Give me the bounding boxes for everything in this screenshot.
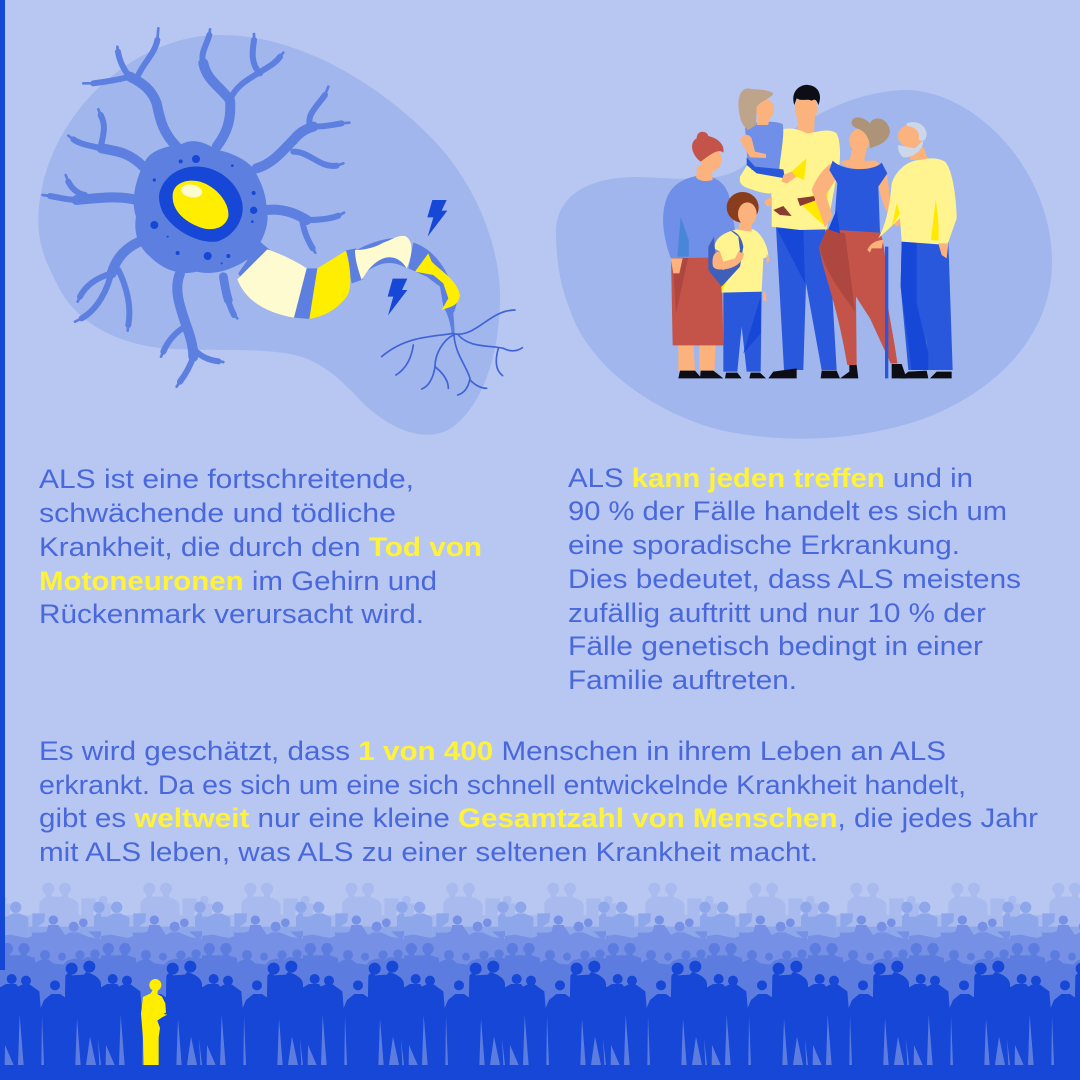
icon: yellow person in crowd: [141, 979, 167, 1065]
boy with backpack: [708, 192, 770, 372]
text block: right column: ALS kann jeden treffen und in: [568, 463, 973, 493]
text block: right column: 90 % der Fälle handelt es sich um: [568, 496, 1007, 526]
axon: [238, 237, 457, 335]
girl carried: [738, 88, 815, 216]
text block: right column: eine sporadische Erkrankung.: [568, 530, 960, 560]
cane: [885, 247, 888, 378]
myelin segments: [237, 249, 307, 318]
illustration: neuron: [38, 28, 522, 435]
text block: left column: schwächende und tödliche: [39, 498, 396, 528]
grandmother left: [663, 132, 766, 378]
text block: full width: mit ALS leben, was ALS zu einer seltenen Krankheit macht.: [39, 837, 818, 867]
text block: right column: Dies bedeutet, dass ALS meistens: [568, 564, 1021, 594]
text block: right column: [568, 463, 1021, 695]
dendrites: [43, 28, 349, 387]
illustration: family: [556, 85, 1052, 439]
blob behind family: [556, 90, 1052, 439]
blob behind neuron: [38, 35, 500, 435]
cell body: [134, 141, 268, 273]
text block: right column: Fälle genetisch bedingt in einer: [568, 631, 983, 661]
text block: left column: Motoneuronen im Gehirn und: [39, 566, 437, 596]
mother: [812, 117, 907, 378]
text block: left column: Krankheit, die durch den Tod von: [39, 532, 482, 562]
text block: full width: gibt es weltweit nur eine kleine Gesamtzahl von Menschen , die jedes Jahr: [39, 803, 1038, 833]
text block: right column: Familie auftreten.: [568, 665, 797, 695]
father: [768, 85, 840, 378]
nucleus: [173, 181, 228, 229]
grandfather: [867, 122, 957, 378]
text block: full width: erkrankt. Da es sich um eine sich schnell entwickelnde Krankheit handelt,: [39, 770, 966, 800]
text block: left column: [39, 464, 482, 629]
text block: full width: [39, 736, 1038, 867]
left edge bar: [0, 0, 5, 970]
text block: left column: ALS ist eine fortschreitende,: [39, 464, 414, 494]
crowd illustration: [0, 870, 1080, 1080]
nucleus ring: [159, 167, 243, 242]
text block: full width: Es wird geschätzt, dass 1 von 400 Menschen in ihrem Leben an ALS: [39, 736, 946, 766]
organelles: [150, 155, 257, 264]
text block: right column: zufällig auftritt und nur 10 % der: [568, 598, 986, 628]
icon: lightning bolts: [427, 200, 447, 237]
text block: left column: Rückenmark verursacht wird.: [39, 599, 424, 629]
axon terminals: [382, 310, 522, 395]
